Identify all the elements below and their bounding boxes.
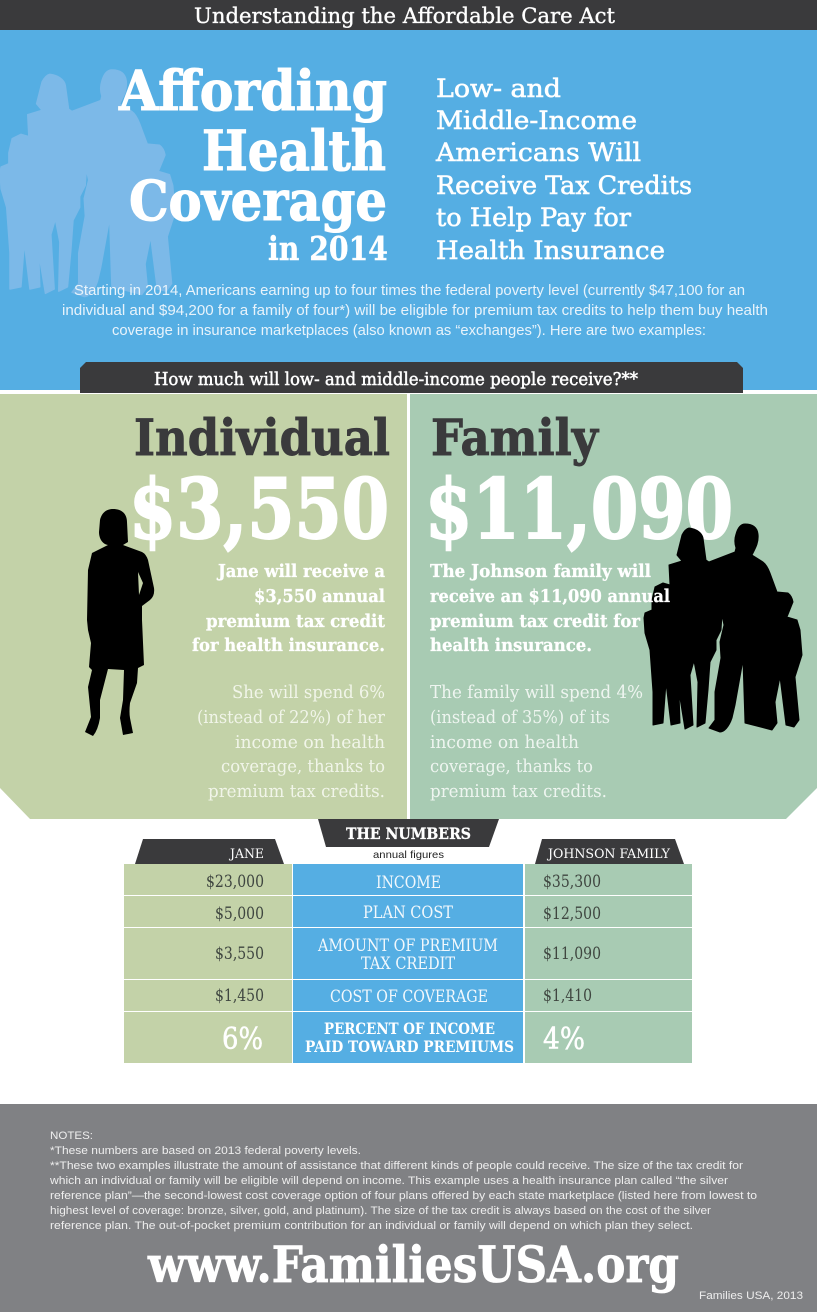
- notes text: reference plan”—the second-lowest cost coverage option of four plans offered by each state marketplace (listed here from lowest to: [50, 1190, 757, 1202]
- text: Johnson family credit statement: receive an $11,090 annual: [430, 586, 670, 607]
- heading: main title: Health: [202, 118, 386, 183]
- panel: footer: [0, 1104, 817, 1312]
- text: family spending: The family will spend 4%: [430, 682, 643, 703]
- subtitle: [435, 74, 692, 265]
- column: Johnson family values: [525, 864, 692, 1063]
- text: Jane spending: premium tax credits.: [208, 781, 385, 802]
- column: Jane values: 6%: [222, 1022, 263, 1057]
- heading: main title: in 2014: [268, 229, 388, 268]
- table heading tab: THE NUMBERS: [346, 824, 471, 843]
- text: Johnson family credit statement: [430, 561, 670, 656]
- text: family spending: premium tax credits.: [430, 781, 607, 802]
- subtitle: Low- and: [436, 74, 561, 103]
- column: Johnson family values: $11,090: [543, 944, 601, 964]
- text: Jane spending: coverage, thanks to: [221, 756, 385, 777]
- text: family spending: [430, 682, 643, 802]
- column: Jane values: $1,450: [215, 986, 264, 1006]
- column: row labels: PERCENT OF INCOME: [324, 1019, 495, 1038]
- text: family spending: coverage, thanks to: [430, 756, 593, 777]
- column: Jane values: $23,000: [206, 872, 264, 892]
- text: Jane credit statement: [192, 561, 386, 656]
- amount: individual credit: $3,550: [129, 462, 389, 558]
- subtitle: Middle-Income: [436, 106, 637, 135]
- column: Johnson family values: $12,500: [543, 904, 601, 924]
- heading: main title: Affording: [118, 58, 387, 123]
- subtitle: Health Insurance: [436, 236, 665, 265]
- text: Jane spending: income on health: [235, 732, 385, 753]
- column: Johnson family values: 4%: [543, 1022, 585, 1057]
- subtitle: Americans Will: [435, 138, 641, 167]
- column: Johnson family values: $1,410: [543, 986, 592, 1006]
- text: Jane credit statement: $3,550 annual: [254, 586, 385, 607]
- column: Jane values: [124, 864, 292, 1063]
- table: the numbers: [124, 819, 692, 1063]
- subtitle: to Help Pay for: [436, 203, 631, 232]
- top title bar: [0, 0, 817, 30]
- column tab: Johnson family: JOHNSON FAMILY: [546, 847, 670, 862]
- website address: www.FamiliesUSA.org: [147, 1235, 679, 1294]
- heading: individual: Individual: [134, 408, 390, 467]
- text: Jane credit statement: premium tax credit: [206, 611, 386, 632]
- text: Jane credit statement: Jane will receive a: [216, 561, 385, 582]
- notes text: which an individual or family will be eligible will depend on income. This example uses a health insurance plan called “the silver: [49, 1175, 728, 1187]
- notes text: reference plan. The out-of-pocket premium contribution for an individual or family will depend on which plan they select.: [50, 1220, 693, 1232]
- column tab: Johnson family: [535, 839, 684, 864]
- column: Jane values: $5,000: [215, 904, 264, 924]
- intro paragraph: Starting in 2014, Americans earning up to four times the federal poverty level (currently $47,100 for an: [74, 283, 745, 299]
- amount: family credit: $11,090: [425, 462, 733, 558]
- text: family spending: (instead of 35%) of its: [430, 707, 610, 728]
- icon: family silhouette: [644, 524, 802, 732]
- column: row labels: PAID TOWARD PREMIUMS: [305, 1037, 514, 1056]
- text: Johnson family credit statement: health insurance.: [430, 635, 592, 656]
- column tab: Jane: JANE: [228, 847, 264, 862]
- text: Johnson family credit statement: premium tax credit for: [430, 611, 640, 632]
- column: row labels: AMOUNT OF PREMIUM: [317, 936, 498, 956]
- text: Jane spending: (instead of 22%) of her: [197, 707, 385, 728]
- heading: main title: [118, 58, 388, 268]
- column: Johnson family values: $35,300: [543, 872, 601, 892]
- column: row labels: PLAN COST: [363, 903, 454, 923]
- top title bar: Understanding the Affordable Care Act: [194, 4, 616, 28]
- intro paragraph: individual and $94,200 for a family of four*) will be eligible for premium tax credits to help them buy health: [62, 303, 768, 319]
- banner: question: [80, 362, 743, 393]
- text: Jane credit statement: for health insurance.: [192, 635, 385, 656]
- text: Johnson family credit statement: The Johnson family will: [430, 561, 651, 582]
- heading: family: Family: [431, 408, 600, 467]
- column tab: Jane: [135, 839, 284, 864]
- credit line: Families USA, 2013: [699, 1290, 803, 1302]
- banner: question: How much will low- and middle-income people receive?**: [154, 369, 638, 390]
- text: Jane spending: [197, 682, 385, 802]
- column: Jane values: $3,550: [215, 944, 264, 964]
- notes text: [49, 1130, 757, 1232]
- text: family spending: income on health: [430, 732, 579, 753]
- notes text: *These numbers are based on 2013 federal poverty levels.: [50, 1145, 361, 1157]
- intro paragraph: coverage in insurance marketplaces (also known as “exchanges”). Here are two examples:: [112, 323, 706, 339]
- subtitle: Receive Tax Credits: [436, 171, 692, 200]
- table heading tab: [318, 819, 499, 847]
- notes text: **These two examples illustrate the amount of assistance that different kinds of people could receive. The size of the tax credit for: [50, 1160, 743, 1172]
- intro paragraph: [62, 283, 768, 339]
- icon: woman silhouette: [85, 509, 154, 736]
- notes text: highest level of coverage: bronze, silver, gold, and platinum). The size of the tax credit is always based on the cost of the silver: [50, 1205, 711, 1217]
- column: row labels: TAX CREDIT: [361, 954, 456, 974]
- column: row labels: COST OF COVERAGE: [330, 987, 488, 1007]
- panel: blue header: [0, 30, 817, 390]
- heading: main title: Coverage: [129, 168, 387, 233]
- notes text: NOTES:: [50, 1130, 93, 1142]
- panel: family: [410, 394, 817, 819]
- table subheading: annual figures: [373, 849, 444, 861]
- text: Jane spending: She will spend 6%: [232, 682, 385, 703]
- panel: individual: [0, 394, 407, 819]
- icon: pale family silhouette: [0, 70, 175, 297]
- column: row labels: INCOME: [376, 873, 441, 893]
- column: row labels: [293, 864, 523, 1063]
